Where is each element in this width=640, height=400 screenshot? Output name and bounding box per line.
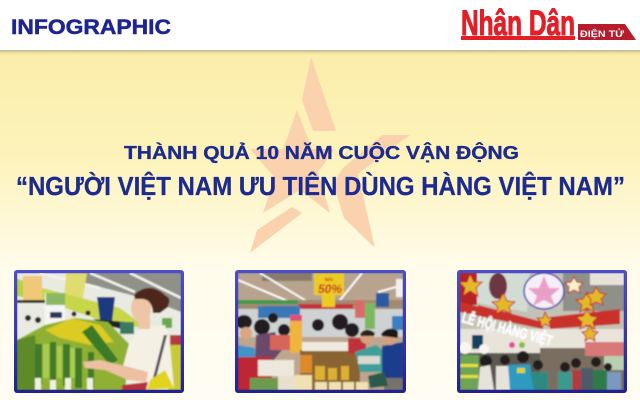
photo 1: shopper choosing vegetables xyxy=(14,270,184,393)
star badge xyxy=(524,273,564,309)
photo 3: Vietnamese goods festival xyxy=(457,270,627,393)
title xyxy=(16,142,625,201)
logo: Nhân Dân Điện Tử: ĐIỆN TỬ xyxy=(580,28,625,39)
festival banners xyxy=(460,302,543,329)
sale sign: 50% xyxy=(314,273,344,307)
title line 1: THÀNH QUẢ 10 NĂM CUỘC VẬN ĐỘNG xyxy=(124,142,519,163)
photo 2: crowded supermarket sale xyxy=(235,270,406,393)
festival sign text: LỄ HỘI HÀNG VIỆT xyxy=(460,308,554,350)
header bar xyxy=(0,0,640,50)
star emblem xyxy=(250,57,410,253)
sale sign: 50%: MÃI xyxy=(325,276,333,282)
sale sign: 50%: 50% xyxy=(318,282,342,296)
header label: INFOGRAPHIC: INFOGRAPHIC xyxy=(11,16,171,39)
logo: Nhân Dân Điện Tử: Nhân Dân xyxy=(461,4,575,43)
